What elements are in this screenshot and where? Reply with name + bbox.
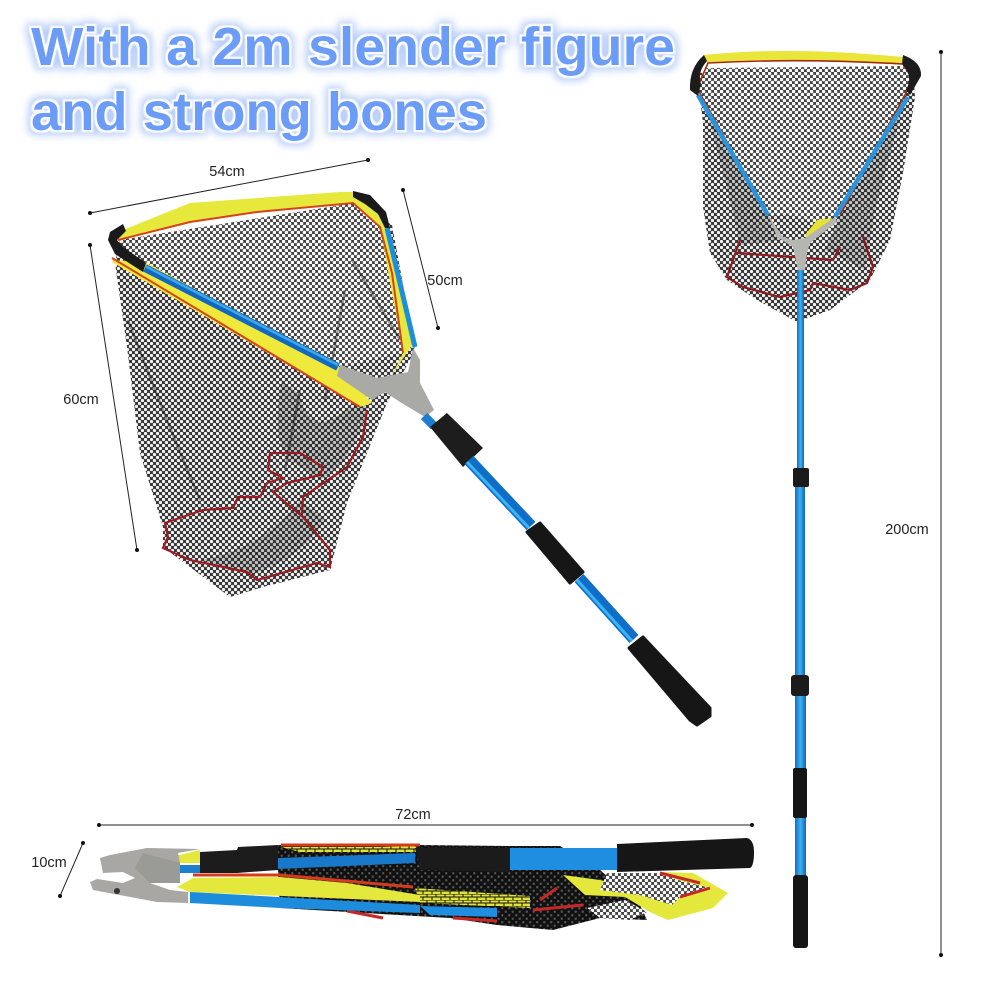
foam grip lower, front — [793, 875, 808, 948]
title — [31, 17, 675, 142]
black collar, angled — [430, 413, 483, 467]
folded yellow hoop band — [177, 877, 420, 902]
dimension: 50cm: 50cm — [427, 273, 463, 289]
blue pole, front — [795, 270, 806, 876]
folded landing net — [90, 838, 754, 930]
lower collar, front — [791, 675, 809, 696]
folded foam grip middle — [415, 848, 510, 872]
foam grip upper, front — [793, 768, 807, 818]
red net rim, front — [727, 237, 873, 297]
folded black collar — [200, 845, 278, 873]
blue handle, angled — [469, 460, 634, 639]
blue frame arms, front — [698, 95, 908, 217]
red hoop trim, angled — [112, 203, 403, 407]
foam grip lower, angled — [629, 637, 710, 725]
black corner caps, angled — [108, 224, 146, 272]
title: and strong bones — [31, 82, 487, 142]
black collars, front — [793, 468, 809, 487]
dimension: 54cm — [88, 158, 370, 215]
open landing net, angled view — [108, 191, 710, 725]
net folds, front — [704, 100, 905, 270]
folded blue segments — [278, 853, 415, 869]
dimension: 72cm — [97, 807, 754, 827]
folded grey cone — [135, 853, 180, 883]
dimension: 60cm: 60cm — [63, 392, 99, 408]
folded grey joint — [90, 848, 200, 903]
yellow hoop, angled — [118, 192, 412, 375]
folded lower blue arm — [190, 892, 420, 913]
folded yellow cell strips — [281, 846, 420, 852]
yellow centre brace, front — [805, 218, 832, 238]
folded white mesh tip — [600, 873, 710, 905]
folded yellow tail — [563, 872, 728, 920]
joint to handle blue link, angled — [424, 416, 434, 426]
folded net mass — [278, 845, 647, 930]
red net rim, angled — [163, 410, 367, 580]
grey joint, front — [768, 215, 837, 270]
dimension: 200cm: 200cm — [885, 522, 929, 538]
blue frame arms, angled — [145, 268, 338, 367]
folded foam grip end — [617, 838, 754, 872]
net folds, angled — [278, 380, 370, 480]
net bag, angled — [115, 203, 415, 597]
net upper mesh, angled — [120, 204, 403, 367]
dimension: 54cm: 54cm — [209, 164, 245, 180]
dimension: 10cm: 10cm — [31, 855, 67, 871]
title: With a 2m slender figure — [31, 17, 675, 77]
folded red trim — [193, 845, 420, 887]
foam grip upper, angled — [527, 523, 583, 583]
dimension: 60cm — [63, 243, 139, 552]
folded small blue link — [180, 865, 200, 873]
upright landing net, front view — [690, 51, 921, 948]
dimension: 200cm — [885, 50, 943, 957]
black corner caps, front — [690, 55, 707, 96]
dimension: 50cm — [401, 188, 463, 330]
dimension: 10cm — [31, 841, 85, 898]
net upper mesh, front — [700, 66, 912, 222]
red hoop trim, front — [697, 61, 913, 215]
folded blue cell strip — [420, 906, 497, 917]
dimension: 72cm: 72cm — [395, 807, 431, 823]
yellow hoop, front — [703, 51, 903, 65]
net bag, front — [697, 67, 915, 322]
grey joint, angled — [337, 348, 434, 417]
